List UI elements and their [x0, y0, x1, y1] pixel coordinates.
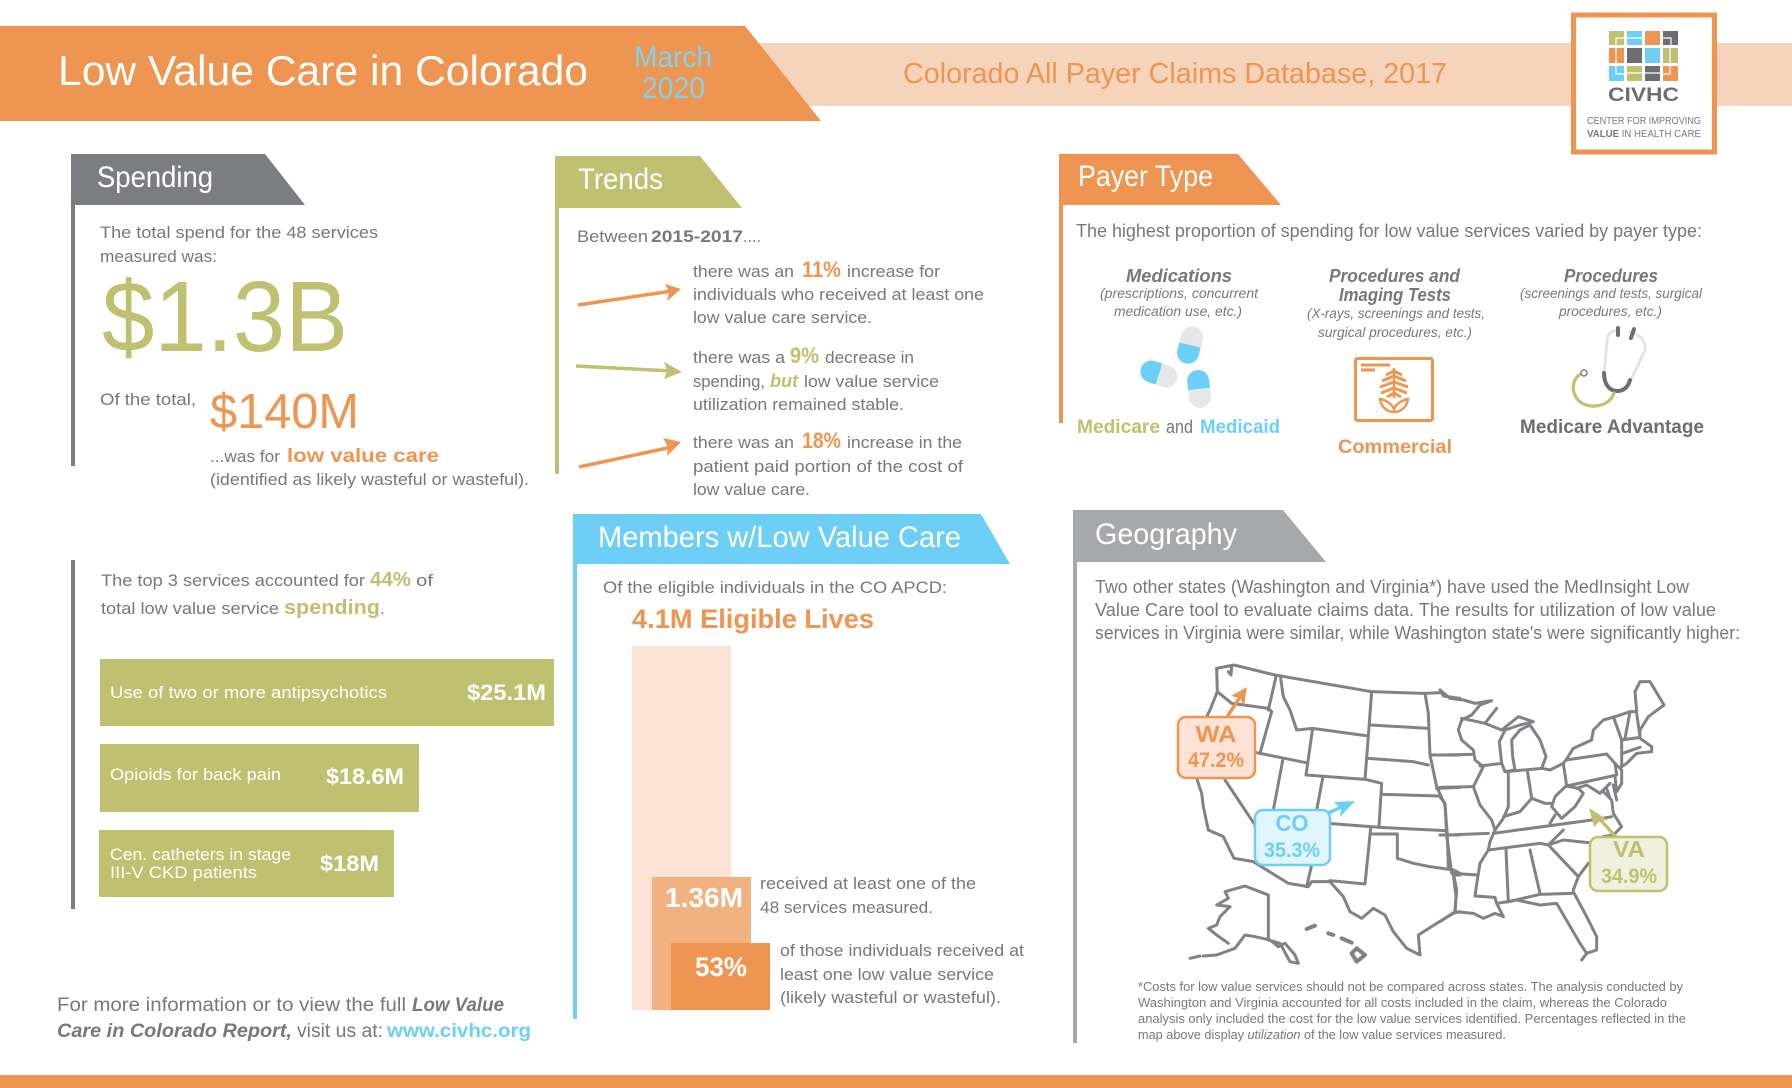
heading: payer type [1059, 154, 1281, 205]
text: top 3 services: . [380, 599, 385, 618]
text: top 3 services: The top 3 services accounted for [101, 571, 365, 590]
label: medicare and medicaid: Medicaid [1200, 417, 1280, 438]
text: received at least one: received at least one of the [760, 874, 976, 893]
stat: 140M low value care [100, 385, 529, 489]
footer text: visit us at: [297, 1021, 383, 1042]
header title banner [0, 26, 821, 121]
callout: Virginia: 34.9% [1601, 865, 1657, 888]
text: payer intro: The highest proportion of spending for low value services varied by payer type: [1076, 221, 1702, 241]
bar: catheters: Cen. catheters in stage [110, 845, 291, 864]
arrow: down 9 percent [576, 362, 682, 379]
trend: 9 percent decrease: utilization remained stable. [693, 395, 904, 414]
text: geography intro: Value Care tool to evaluate claims data. The results for utilization of low value [1095, 600, 1716, 620]
bar: antipsychotics: Use of two or more antipsychotics [110, 683, 387, 702]
panel: spending [71, 154, 529, 489]
heading: payer type: Payer Type [1078, 160, 1213, 193]
trend: 18 percent increase: low value care. [693, 480, 810, 499]
bar: opioids: Opioids for back pain [110, 765, 281, 784]
column: procedures and imaging: Procedures and [1329, 266, 1461, 286]
text: top 3 services [101, 569, 433, 619]
footnote: Washington and Virginia accounted for all costs included in the claim, whereas the Colorado [1138, 995, 1667, 1010]
text: 53 percent description [780, 941, 1024, 1007]
panel: payer type [1059, 154, 1704, 458]
CIVHC logo: VALUE IN HEALTH CARE [1587, 128, 1701, 140]
footnote: analysis only included the cost for the low value services identified. Percentages reflected in the [1138, 1011, 1686, 1026]
text: geography intro: Two other states (Washington and Virginia*) have used the MedInsight Low [1095, 577, 1690, 597]
bar: catheters: $18M [320, 851, 379, 876]
trend: 11 percent increase: there was an [693, 262, 794, 281]
trend: 9 percent decrease [693, 343, 939, 414]
callout: Washington: WA [1196, 721, 1236, 747]
stat: 140M low value care: $140M [210, 385, 359, 439]
footer text: Low Value [412, 995, 504, 1016]
stat: 140M low value care: Of the total, [100, 390, 196, 409]
footer text: Care in Colorado Report, [57, 1021, 292, 1042]
bar: opioids: $18.6M [326, 764, 404, 789]
trend: 18 percent increase [693, 428, 963, 499]
trend: 18 percent increase: there was an [693, 433, 794, 452]
text: 53 percent description: of those individuals received at [780, 941, 1024, 960]
CIVHC logo [1574, 15, 1714, 152]
text: top 3 services: of [416, 571, 433, 590]
callout: Virginia: VA [1613, 836, 1645, 862]
column: procedures: Procedures [1564, 266, 1658, 286]
label: medicare and medicaid [1077, 417, 1280, 438]
panel: members with low value care [573, 514, 1024, 1019]
callout: Colorado [1255, 801, 1355, 865]
panel: top 3 services [71, 560, 554, 909]
icon: capsules [1138, 324, 1212, 409]
text: eligible individuals: Of the eligible individuals in the CO APCD: [603, 578, 947, 597]
bar: catheters [99, 830, 394, 897]
trend: 11 percent increase: individuals who received at least one [693, 285, 984, 304]
text: between years: .... [743, 227, 761, 246]
stat: eligible lives: 4.1M Eligible Lives [632, 604, 874, 634]
nested bars chart: 53% [695, 952, 747, 982]
icon: stethoscope [1573, 328, 1645, 406]
trend: 9 percent decrease: spending, [693, 372, 765, 391]
text: received at least one [760, 874, 976, 917]
trend: 18 percent increase: increase in the [847, 433, 962, 452]
text: top 3 services: total low value service [101, 599, 279, 618]
label: medicare advantage: Medicare Advantage [1520, 417, 1704, 438]
heading: spending: Spending [97, 161, 213, 194]
column: medications: Medications [1126, 266, 1232, 286]
trend: 9 percent decrease: there was a [693, 348, 786, 367]
column: procedures: procedures, etc.) [1558, 304, 1662, 319]
text: total spend intro: The total spend for the 48 services [100, 223, 378, 242]
trend: 11 percent increase: low value care service. [693, 308, 872, 327]
label: commercial: Commercial [1338, 437, 1452, 458]
panel: trends [555, 156, 984, 499]
footer text: For more information or to view the full [57, 995, 406, 1016]
text: total spend intro: measured was: [100, 247, 217, 266]
text: between years [577, 227, 761, 246]
header title banner: Low Value Care in Colorado [58, 47, 588, 94]
bar: catheters: III-V CKD patients [110, 863, 257, 882]
heading: members [573, 514, 1010, 564]
header subtitle band: Colorado All Payer Claims Database, 2017 [903, 58, 1447, 90]
column: procedures and imaging: surgical procedures, etc.) [1318, 325, 1472, 340]
footnote: *Costs for low value services should not be compared across states. The analysis conducted by [1138, 979, 1683, 994]
stat: 140M low value care: ...was for [210, 447, 280, 466]
label: medicare and medicaid: Medicare [1077, 417, 1160, 438]
text: 53 percent description: (likely wasteful or wasteful). [780, 988, 1001, 1007]
arrow: up 18 percent [579, 438, 681, 467]
column: medications: (prescriptions, concurrent [1100, 286, 1259, 301]
stat: 140M low value care: low value care [287, 446, 439, 467]
trend: 11 percent increase: 11% [802, 257, 841, 282]
column: procedures and imaging: Imaging Tests [1339, 285, 1451, 305]
trend: 9 percent decrease: 9% [790, 343, 819, 368]
CIVHC logo: CENTER FOR IMPROVING [1587, 115, 1701, 127]
trend: 11 percent increase: increase for [847, 262, 940, 281]
trend: 18 percent increase: patient paid portion of the cost of [693, 457, 963, 476]
column: medications: medication use, etc.) [1114, 304, 1242, 319]
stat: 1.3B total: $1.3B [102, 261, 348, 373]
callout: Colorado: 35.3% [1264, 839, 1320, 862]
header subtitle band [740, 43, 1792, 106]
trend: 18 percent increase: 18% [802, 428, 841, 453]
trend: 9 percent decrease: decrease in [825, 348, 914, 367]
text: total spend intro [100, 223, 378, 266]
text: between years: 2015-2017 [651, 227, 743, 246]
nested bars chart: 1.36M [665, 882, 743, 913]
text: top 3 services: spending [284, 597, 380, 619]
column: procedures and imaging [1307, 266, 1485, 458]
footnote: map above display utilization of the low value services measured. [1138, 1027, 1506, 1042]
bar: antipsychotics [100, 659, 554, 726]
stat: 140M low value care: (identified as likely wasteful or wasteful). [210, 470, 529, 489]
text: top 3 services: 44% [370, 569, 411, 591]
callout: Washington: 47.2% [1188, 749, 1244, 772]
heading: geography: Geography [1095, 518, 1237, 551]
trend: 9 percent decrease: low value service [804, 372, 939, 391]
bar: antipsychotics: $25.1M [467, 680, 546, 705]
trend: 11 percent increase [693, 257, 984, 327]
column: procedures [1520, 266, 1704, 438]
heading: spending [71, 154, 305, 205]
bottom bar [0, 1075, 1792, 1088]
icon: x-ray [1356, 358, 1432, 420]
heading: trends [555, 156, 742, 208]
heading: geography [1073, 510, 1326, 562]
arrow: up 11 percent [578, 284, 681, 305]
column: procedures and imaging: (X-rays, screenings and tests, [1307, 306, 1485, 321]
text: geography intro [1095, 577, 1740, 643]
footer text [57, 995, 531, 1042]
trend: 9 percent decrease: but [770, 371, 799, 391]
label: medicare and medicaid: and [1166, 417, 1193, 437]
panel: geography [1073, 510, 1740, 1043]
CIVHC logo: CIVHC [1608, 85, 1679, 106]
callout: Washington [1178, 687, 1255, 778]
header title banner: March [634, 41, 712, 74]
bar: opioids [100, 744, 419, 812]
column: procedures: (screenings and tests, surgical [1520, 286, 1703, 301]
heading: members: Members w/Low Value Care [598, 521, 961, 554]
US map [1190, 665, 1664, 963]
text: geography intro: services in Virginia were similar, while Washington state's were significantly higher: [1095, 623, 1740, 643]
heading: trends: Trends [578, 163, 663, 196]
text: received at least one: 48 services measured. [760, 898, 933, 917]
callout: Virginia [1589, 808, 1667, 891]
callout: Colorado: CO [1276, 810, 1308, 836]
footnote [1138, 979, 1686, 1042]
column: medications [1077, 266, 1280, 438]
header title banner: 2020 [642, 72, 705, 105]
text: between years: Between [577, 227, 648, 246]
footer text: www.civhc.org [386, 1021, 531, 1042]
text: 53 percent description: least one low value service [780, 965, 994, 984]
nested bars chart [632, 646, 770, 1010]
